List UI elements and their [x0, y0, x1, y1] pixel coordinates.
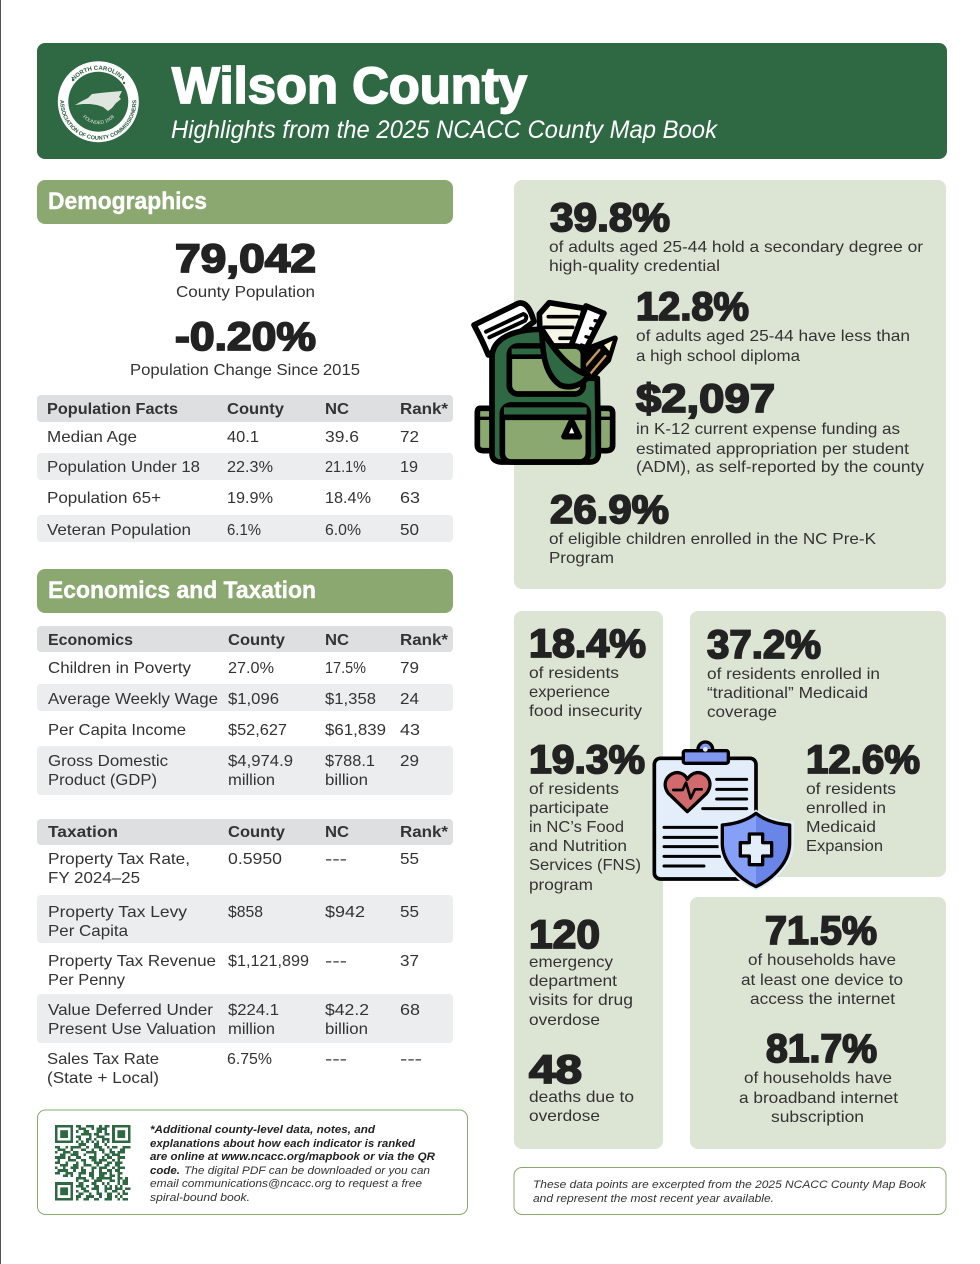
table: population facts: 40.1 [227, 429, 259, 446]
icon: association seal: FOUNDED 1908 [82, 114, 114, 124]
table: economics: $52,627 [228, 722, 287, 739]
table: taxation: $942 [325, 904, 365, 921]
stat: households with broadband: 81.7% [766, 1027, 877, 1071]
table: population facts: NC [325, 401, 349, 418]
stat: county population [175, 237, 316, 301]
note text: spiral-bound book. [150, 1192, 250, 1204]
callout: data source note: These data points are excerpted from the 2025 NCACC County Map Book [533, 1179, 927, 1191]
stat: traditional Medicaid: 37.2% [707, 623, 821, 667]
stat: NC Pre-K enrollment: 26.9% [550, 488, 669, 532]
table: economics: billion [325, 772, 368, 789]
table: taxation: Per Penny [48, 972, 125, 989]
table: taxation: million [228, 1021, 275, 1038]
table: taxation: Property Tax Levy [48, 904, 187, 921]
stat: food insecurity [529, 622, 646, 720]
callout: data source note: and represent the most recent year available. [533, 1193, 774, 1205]
table: population facts [37, 395, 453, 542]
table: economics: Gross Domestic [48, 753, 168, 770]
table: taxation: --- [325, 851, 347, 868]
stat: FNS participation [529, 738, 645, 894]
subtitle: Highlights from the 2025 NCACC County Map Book [171, 116, 718, 144]
table: economics: County [228, 632, 285, 649]
table: taxation: --- [400, 1051, 422, 1068]
stat: NC Pre-K enrollment [549, 488, 876, 567]
panel: food and overdose [514, 611, 663, 1149]
stat: secondary degree or credential: 39.8% [550, 196, 670, 240]
stat: households with a device [741, 909, 903, 1008]
table: taxation: FY 2024–25 [48, 870, 140, 887]
stat: emergency department visits: overdose [529, 1012, 600, 1029]
stat: FNS participation: Services (FNS) [529, 857, 641, 874]
table: population facts: Rank* [400, 401, 449, 418]
table: taxation: Value Deferred Under [48, 1002, 214, 1019]
table: population facts: 6.0% [325, 522, 361, 539]
table: taxation: --- [325, 1051, 347, 1068]
note text: *Additional county-level data, notes, and [150, 1124, 375, 1136]
table: economics: $1,096 [228, 691, 279, 708]
stat: households with broadband: subscription [771, 1109, 864, 1126]
table: population facts: 39.6 [325, 429, 359, 446]
stat: traditional Medicaid: coverage [707, 704, 777, 721]
stat: secondary degree or credential: high-quality credential [549, 258, 720, 275]
stat: emergency department visits: emergency [529, 954, 613, 971]
table: economics: Per Capita Income [48, 722, 186, 739]
table: taxation [37, 819, 453, 1087]
table: taxation: 68 [400, 1002, 420, 1019]
table: taxation: 6.75% [227, 1051, 272, 1068]
stat: less than high school: 12.8% [636, 285, 749, 329]
table: taxation: billion [325, 1021, 368, 1038]
table: economics: $788.1 [325, 753, 375, 770]
table: taxation: Taxation [48, 824, 118, 841]
table: population facts: 72 [400, 429, 419, 446]
stat: Medicaid expansion [806, 738, 920, 855]
icon: association seal [58, 61, 139, 142]
table: taxation: 55 [400, 904, 419, 921]
stat: households with a device: at least one device to [741, 972, 903, 989]
stat: Medicaid expansion: of residents [806, 781, 896, 798]
note text: code. [150, 1165, 180, 1177]
section heading: demographics [37, 180, 453, 224]
table: population facts: 50 [400, 522, 419, 539]
stat: households with broadband [739, 1027, 899, 1126]
table: economics: Rank* [400, 632, 449, 649]
panel: education [514, 180, 946, 589]
stat: FNS participation: program [529, 877, 593, 894]
stat: Medicaid expansion: Expansion [806, 838, 883, 855]
stat: FNS participation: and Nutrition [529, 838, 627, 855]
stat: food insecurity: food insecurity [529, 703, 642, 720]
stat: FNS participation: of residents [529, 781, 619, 798]
stat: per-student funding: in K-12 current expense funding as [636, 421, 900, 438]
table: taxation: Present Use Valuation [48, 1021, 216, 1038]
table: taxation: County [228, 824, 285, 841]
stat: overdose deaths: 48 [529, 1048, 582, 1092]
table: population facts: 22.3% [227, 459, 273, 476]
table: economics: $1,358 [325, 691, 376, 708]
title: Wilson County [172, 57, 528, 114]
icon: association seal: NORTH CAROLINA [71, 66, 124, 81]
stat: county population: County Population [176, 284, 315, 301]
stat: overdose deaths: overdose [529, 1108, 600, 1125]
stat: less than high school: of adults aged 25-44 have less than [636, 328, 910, 345]
stat: traditional Medicaid: of residents enrolled in [707, 666, 880, 683]
stat: traditional Medicaid: “traditional” Medicaid [707, 685, 868, 702]
table: taxation: 0.5950 [228, 851, 282, 868]
callout: data source note [514, 1168, 946, 1214]
stat: population change: Population Change Since 2015 [130, 362, 360, 379]
stat: emergency department visits: 120 [529, 913, 600, 957]
stat: secondary degree or credential: of adults aged 25-44 hold a secondary degree or [549, 239, 924, 256]
table: economics: 43 [400, 722, 420, 739]
stat: per-student funding [636, 377, 924, 476]
stat: households with broadband: of households have [744, 1070, 892, 1087]
stat: food insecurity: experience [529, 684, 610, 701]
table: taxation: NC [325, 824, 349, 841]
stat: households with a device: 71.5% [765, 909, 877, 953]
table: population facts: 6.1% [227, 522, 261, 539]
stat: per-student funding: estimated appropriation per student [636, 441, 910, 458]
table: population facts: County [227, 401, 284, 418]
table: taxation: $1,121,899 [228, 953, 309, 970]
table: taxation: Sales Tax Rate [47, 1051, 159, 1068]
table: economics: 24 [400, 691, 419, 708]
table: economics: Children in Poverty [48, 660, 191, 677]
stat: food insecurity: 18.4% [529, 622, 646, 666]
stat: FNS participation: participate [529, 800, 609, 817]
table: population facts: 19.9% [227, 490, 273, 507]
table: taxation: 37 [400, 953, 419, 970]
stat: emergency department visits [529, 913, 633, 1029]
stat: households with broadband: a broadband internet [739, 1090, 899, 1107]
table: population facts: Veteran Population [47, 522, 191, 539]
stat: households with a device: of households have [748, 952, 896, 969]
icon: clipboard and shield [654, 742, 794, 891]
icon: backpack [474, 303, 615, 462]
icon: QR code [55, 1126, 130, 1199]
stat: county population: 79,042 [175, 237, 316, 281]
note text: explanations about how each indicator is ranked [150, 1138, 415, 1150]
table: population facts: Population Facts [47, 401, 178, 418]
stat: Medicaid expansion: 12.6% [806, 738, 920, 782]
table: taxation: $858 [228, 904, 263, 921]
icon: association seal: ASSOCIATION OF COUNTY COMMISSIONERS [60, 100, 136, 140]
table: population facts: 19 [400, 459, 418, 476]
stat: emergency department visits: visits for drug [529, 992, 633, 1009]
table: economics: $4,974.9 [228, 753, 293, 770]
stat: per-student funding: (ADM), as self-reported by the county [636, 459, 924, 476]
panel: Medicaid [690, 611, 946, 877]
table: economics: Economics [48, 632, 133, 649]
table: economics: 29 [400, 753, 419, 770]
stat: households with a device: access the internet [750, 991, 896, 1008]
table: taxation: $224.1 [228, 1002, 279, 1019]
table: economics [37, 626, 453, 795]
stat: less than high school: a high school diploma [636, 348, 800, 365]
callout: additional data note with QR code [38, 1110, 468, 1214]
stat: less than high school [636, 285, 910, 365]
section heading: economics and taxation [37, 569, 453, 613]
section heading: demographics: Demographics [48, 188, 207, 215]
table: taxation: (State + Local) [47, 1070, 159, 1087]
table: taxation: --- [325, 953, 347, 970]
note text [150, 1124, 435, 1204]
table: economics: Product (GDP) [48, 772, 157, 789]
table: population facts: 21.1% [325, 459, 366, 476]
stat: overdose deaths [529, 1048, 634, 1125]
table: taxation: $42.2 [325, 1002, 369, 1019]
stat: traditional Medicaid [707, 623, 880, 721]
stat: Medicaid expansion: enrolled in [806, 800, 886, 817]
stat: population change [130, 315, 360, 379]
table: population facts: Population 65+ [47, 490, 161, 507]
table: population facts: 18.4% [325, 490, 371, 507]
stat: NC Pre-K enrollment: of eligible children enrolled in the NC Pre-K [549, 531, 876, 548]
stat: FNS participation: in NC’s Food [529, 819, 624, 836]
table: population facts: Population Under 18 [47, 459, 200, 476]
stat: overdose deaths: deaths due to [529, 1089, 634, 1106]
table: economics: 17.5% [325, 660, 366, 677]
table: taxation: Property Tax Rate, [48, 851, 190, 868]
stat: per-student funding: $2,097 [636, 377, 775, 421]
table: economics: 27.0% [228, 660, 274, 677]
header banner [37, 43, 947, 159]
stat: FNS participation: 19.3% [529, 738, 645, 782]
stat: NC Pre-K enrollment: Program [549, 550, 614, 567]
table: taxation: Rank* [400, 824, 449, 841]
table: economics: million [228, 772, 275, 789]
table: population facts: Median Age [47, 429, 137, 446]
panel: internet access [690, 897, 946, 1149]
note text: The digital PDF can be downloaded or you can [184, 1165, 430, 1177]
stat: Medicaid expansion: Medicaid [806, 819, 876, 836]
stat: secondary degree or credential [549, 196, 924, 275]
table: economics: Average Weekly Wage [48, 691, 218, 708]
table: taxation: Per Capita [48, 923, 128, 940]
table: taxation: Property Tax Revenue [48, 953, 216, 970]
note text: are online at www.ncacc.org/mapbook or via the QR [150, 1151, 435, 1163]
note text: email communications@ncacc.org to request a free [150, 1178, 422, 1190]
table: population facts: 63 [400, 490, 420, 507]
table: economics: $61,839 [325, 722, 386, 739]
stat: emergency department visits: department [529, 973, 618, 990]
table: economics: 79 [400, 660, 419, 677]
table: economics: NC [325, 632, 349, 649]
stat: food insecurity: of residents [529, 665, 619, 682]
stat: population change: -0.20% [175, 315, 316, 359]
table: taxation: 55 [400, 851, 419, 868]
section heading: economics and taxation: Economics and Taxation [48, 577, 316, 604]
